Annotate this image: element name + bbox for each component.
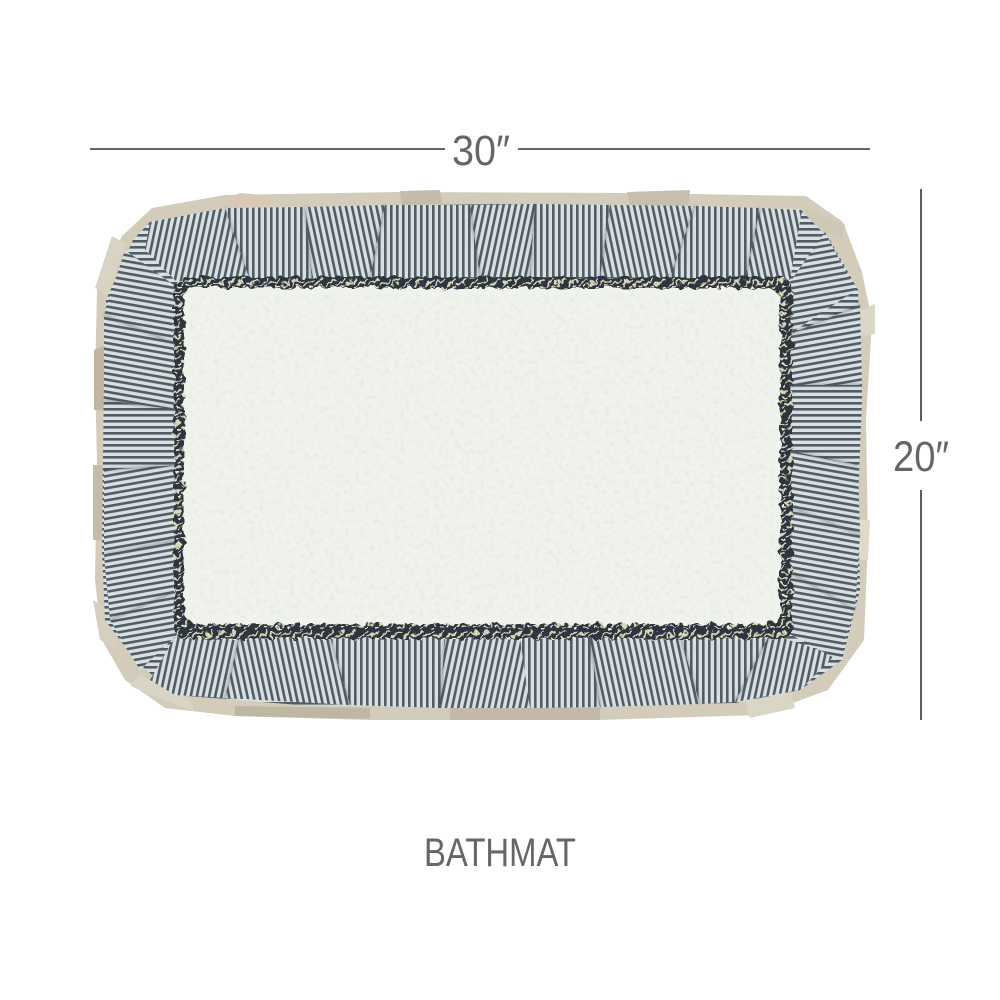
gray striped ruffle: right folds: [786, 232, 862, 660]
gray striped ruffle: bottom folds: [150, 632, 835, 708]
gray striped ruffle: left folds: [104, 250, 178, 670]
ruffle fold shadows: [104, 204, 862, 708]
beige outer ruffle: [93, 190, 875, 720]
width dimension: 30 inches: 30″: [452, 127, 510, 175]
gray striped ruffle: top folds: [145, 204, 802, 285]
dark speckled tufted border: [174, 277, 792, 639]
height dimension: 20 inches: 20″: [893, 433, 949, 481]
bathmat product illustration: [93, 190, 875, 720]
product label: BATHMAT: [424, 831, 576, 875]
white shag centre: [184, 288, 780, 624]
gray striped ruffle: base: [102, 204, 862, 708]
